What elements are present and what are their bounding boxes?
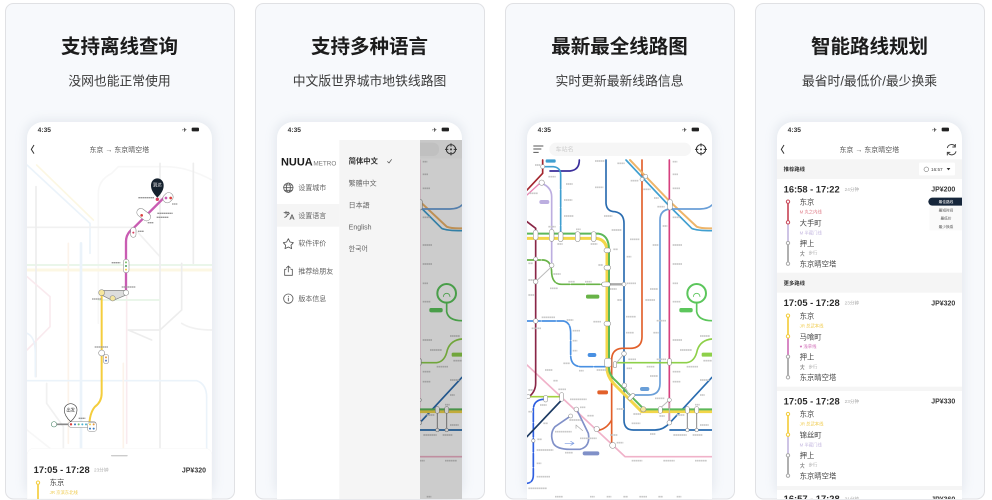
menu: city: 设置城市	[298, 183, 326, 192]
route card 2: 步行	[809, 363, 818, 370]
sort options: 最佳路线	[939, 199, 954, 204]
logo: NUUA	[281, 157, 313, 169]
status bar: ✈	[432, 127, 437, 134]
language list pane: English	[349, 224, 372, 231]
status bar	[288, 128, 449, 132]
route card 3: JR 总武本线	[800, 421, 824, 428]
route card 1: M 半蔵门线	[800, 229, 822, 236]
language list pane: 한국어	[349, 244, 368, 253]
icon: globe	[284, 183, 293, 192]
phone: route map screen	[25, 120, 214, 499]
section label: more routes: 更多路线	[784, 279, 806, 287]
route: yellow line segment	[89, 293, 102, 427]
route card 3: 东京晴空塔	[800, 471, 837, 480]
heading: routes: 智能路线规划	[811, 36, 928, 58]
heading: offline: 支持离线查询	[61, 35, 178, 58]
route: magenta line segment	[126, 195, 167, 293]
bottom route card: 23分钟	[94, 467, 109, 474]
route card 1: JP¥200	[931, 187, 955, 194]
phone: language menu screen	[275, 120, 464, 499]
route card 2	[777, 293, 962, 387]
route card 4, cut off	[777, 490, 962, 500]
metro network map	[526, 158, 714, 499]
language list pane	[339, 140, 420, 499]
language list pane: 繁體中文	[349, 179, 377, 188]
menu: rating: 软件评价	[298, 239, 326, 248]
route card 3: 锦丝町	[800, 431, 822, 440]
route card 3: JP¥330	[931, 399, 955, 406]
panel: offline support	[6, 4, 234, 499]
search header: ✈	[682, 127, 687, 134]
bottom route card: JP¥320	[182, 467, 206, 474]
route card 1: M 丸之内线	[800, 209, 822, 216]
sort options: 最短时间	[939, 207, 954, 212]
dimmed metro map	[420, 140, 462, 499]
route card 1: 步行	[809, 250, 818, 257]
selected row	[277, 204, 339, 227]
route card 2: JP¥320	[931, 300, 955, 307]
phone: route list screen	[775, 120, 964, 500]
route card 2: ♥ 浅草线	[800, 343, 817, 350]
route card 2: 押上	[800, 353, 814, 362]
menu: share: 推荐给朋友	[298, 267, 333, 276]
header bar: 东京 → 东京晴空塔	[89, 145, 149, 154]
search header	[533, 128, 707, 156]
language list pane: 简体中文	[349, 157, 379, 166]
header bar: 4:35	[38, 127, 51, 134]
lines	[527, 365, 712, 457]
route card 3: M 半蔵门线	[800, 441, 822, 448]
route card 2: JR 总武本线	[800, 322, 824, 329]
subheading: routes: 最省时/最低价/最少换乘	[802, 74, 937, 88]
language list pane: 日本語	[349, 200, 370, 209]
route card 1: 押上	[800, 239, 814, 248]
panel: multi language	[256, 4, 484, 499]
destination pin	[151, 178, 164, 198]
route card 2: 马喰町	[800, 332, 822, 341]
time selector: 16:57	[931, 167, 943, 172]
route card 3: 23分钟	[845, 398, 860, 405]
route card 2: 东京晴空塔	[800, 373, 837, 382]
bottom route card: 17:05 - 17:28	[34, 465, 90, 475]
route card 1: 24分钟	[845, 186, 860, 193]
route card 1: 16:58 - 17:22	[784, 185, 840, 195]
route card 3: 东京	[800, 410, 814, 419]
phone: full metro map screen	[525, 120, 714, 499]
search header: 车站名	[556, 146, 574, 154]
heading: latest lines: 最新最全线路图	[551, 35, 688, 58]
heading: languages: 支持多种语言	[311, 36, 428, 58]
route card 1	[777, 179, 962, 273]
route card 3: 押上	[800, 451, 814, 460]
start pin	[64, 404, 77, 422]
faint background metro map	[27, 163, 212, 448]
subheading: languages: 中文版世界城市地铁线路图	[293, 74, 446, 88]
route card 2: 东京	[800, 311, 814, 320]
route card 1: 东京	[800, 198, 814, 207]
route card 2: 17:05 - 17:28	[784, 298, 840, 308]
bottom route card: 东京	[50, 478, 64, 487]
menu: version: 版本信息	[298, 294, 326, 303]
icon: star	[283, 239, 293, 249]
bottom route card: JR 京滨东北线	[50, 489, 78, 496]
header bar: ✈	[182, 127, 187, 134]
station labels	[528, 161, 712, 497]
icon: translate	[284, 211, 294, 219]
line name tags	[539, 159, 714, 455]
section label: recommended: 推荐路线	[784, 165, 806, 173]
subheading: offline: 没网也能正常使用	[68, 74, 171, 88]
route list header: ✈	[932, 127, 937, 134]
icon: share	[285, 266, 292, 275]
route card 1: 东京晴空塔	[800, 259, 837, 268]
start pin: 出发	[66, 406, 76, 413]
route card 3: 步行	[809, 462, 818, 469]
subheading: latest lines: 实时更新最新线路信息	[556, 74, 684, 88]
search header: 4:35	[538, 127, 551, 134]
stations and transfer nodes on route	[51, 191, 175, 431]
sort options: 最低价	[941, 216, 952, 221]
route card 3	[777, 391, 962, 486]
bottom route card	[27, 448, 212, 499]
side menu	[277, 157, 339, 303]
route list header: 东京 → 东京晴空塔	[839, 145, 899, 154]
time selector	[919, 163, 955, 175]
route card 3: 17:05 - 17:28	[784, 397, 840, 407]
route card 2: 23分钟	[845, 300, 860, 307]
icon: info	[284, 294, 293, 303]
header bar	[30, 128, 199, 154]
status bar: 4:35	[288, 127, 301, 134]
menu: language: 设置语言	[298, 211, 326, 220]
logo	[282, 158, 336, 166]
destination pin: 到达	[153, 181, 162, 188]
route list header: 4:35	[788, 127, 801, 134]
panel: latest lines	[506, 4, 734, 499]
station labels	[79, 198, 177, 418]
panel: smart route planning	[756, 4, 984, 500]
stations	[526, 165, 699, 448]
logo: METRO	[313, 160, 336, 167]
route list header	[777, 122, 962, 159]
route card 1: 大手町	[800, 219, 822, 228]
sort options: 最少换乘	[939, 224, 954, 229]
sort options	[928, 198, 962, 230]
